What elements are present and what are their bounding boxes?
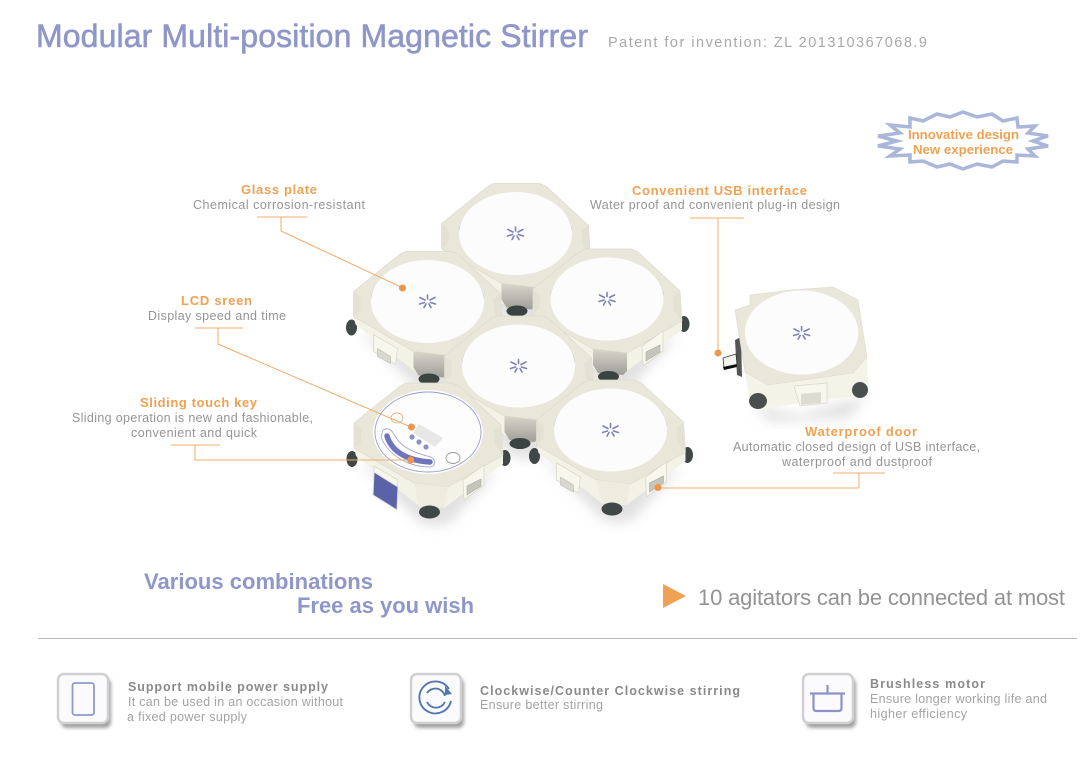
module: bottom right — [529, 380, 693, 522]
callout: sliding touch key: convenient and quick — [131, 426, 258, 440]
title: Modular Multi-position Magnetic Stirrer — [36, 18, 588, 54]
callout: glass plate: Chemical corrosion-resistant — [193, 198, 366, 212]
callout: LCD screen: LCD sreen — [181, 293, 252, 308]
callout: waterproof door — [654, 424, 980, 491]
module: centre — [437, 316, 601, 458]
badge: innovative design: Innovative design — [908, 127, 1019, 142]
icon: USB plug — [723, 354, 737, 370]
callout: glass plate — [193, 182, 406, 292]
badge: innovative design: New experience — [913, 142, 1013, 157]
capacity note: 10 agitators can be connected at most — [698, 585, 1065, 610]
module: right — [526, 249, 690, 391]
icon: tablet — [58, 674, 111, 728]
callout: sliding touch key: Sliding touch key — [140, 395, 258, 410]
callout: waterproof door: waterproof and dustproof — [781, 455, 933, 469]
callout: LCD screen: Display speed and time — [148, 309, 286, 323]
slogan: Various combinations — [144, 569, 373, 594]
patent number: Patent for invention: ZL 201310367068.9 — [608, 35, 927, 51]
slogan — [144, 569, 474, 618]
callout: USB interface: Water proof and convenient plug-in design — [590, 198, 840, 212]
slogan: Free as you wish — [297, 593, 474, 618]
feature: brushless motor: Brushless motor — [870, 677, 985, 691]
module: control unit — [346, 383, 510, 525]
icon: rotation arrows — [411, 674, 464, 728]
feature: clockwise stirring — [411, 674, 740, 728]
feature: mobile power supply — [58, 674, 344, 728]
callout: sliding touch key — [72, 395, 414, 464]
feature: clockwise stirring: Ensure better stirring — [480, 698, 603, 712]
module: left — [346, 252, 510, 394]
feature: mobile power supply: It can be used in an occasion without — [128, 695, 344, 709]
module: top — [434, 184, 598, 326]
callout: waterproof door: Waterproof door — [805, 424, 917, 439]
feature: mobile power supply: Support mobile power supply — [128, 680, 328, 694]
callout: USB interface — [590, 183, 840, 356]
feature: clockwise stirring: Clockwise/Counter Clockwise stirring — [480, 684, 740, 698]
icon: motor — [803, 674, 856, 728]
callout: waterproof door: Automatic closed design of USB interface, — [733, 440, 980, 454]
feature: mobile power supply: a fixed power supply — [127, 710, 248, 724]
callout: LCD screen — [148, 293, 415, 430]
callout: glass plate: Glass plate — [241, 182, 317, 197]
callout: sliding touch key: Sliding operation is new and fashionable, — [72, 411, 313, 425]
feature: brushless motor: higher efficiency — [870, 707, 968, 721]
feature: brushless motor: Ensure longer working life and — [870, 692, 1047, 706]
badge: innovative design — [878, 112, 1048, 169]
feature: brushless motor — [803, 674, 1047, 728]
stirrer module array — [346, 184, 693, 525]
arrow: orange triangle — [663, 584, 686, 608]
stand-alone module with USB — [723, 287, 868, 422]
callout: USB interface: Convenient USB interface — [632, 183, 807, 198]
